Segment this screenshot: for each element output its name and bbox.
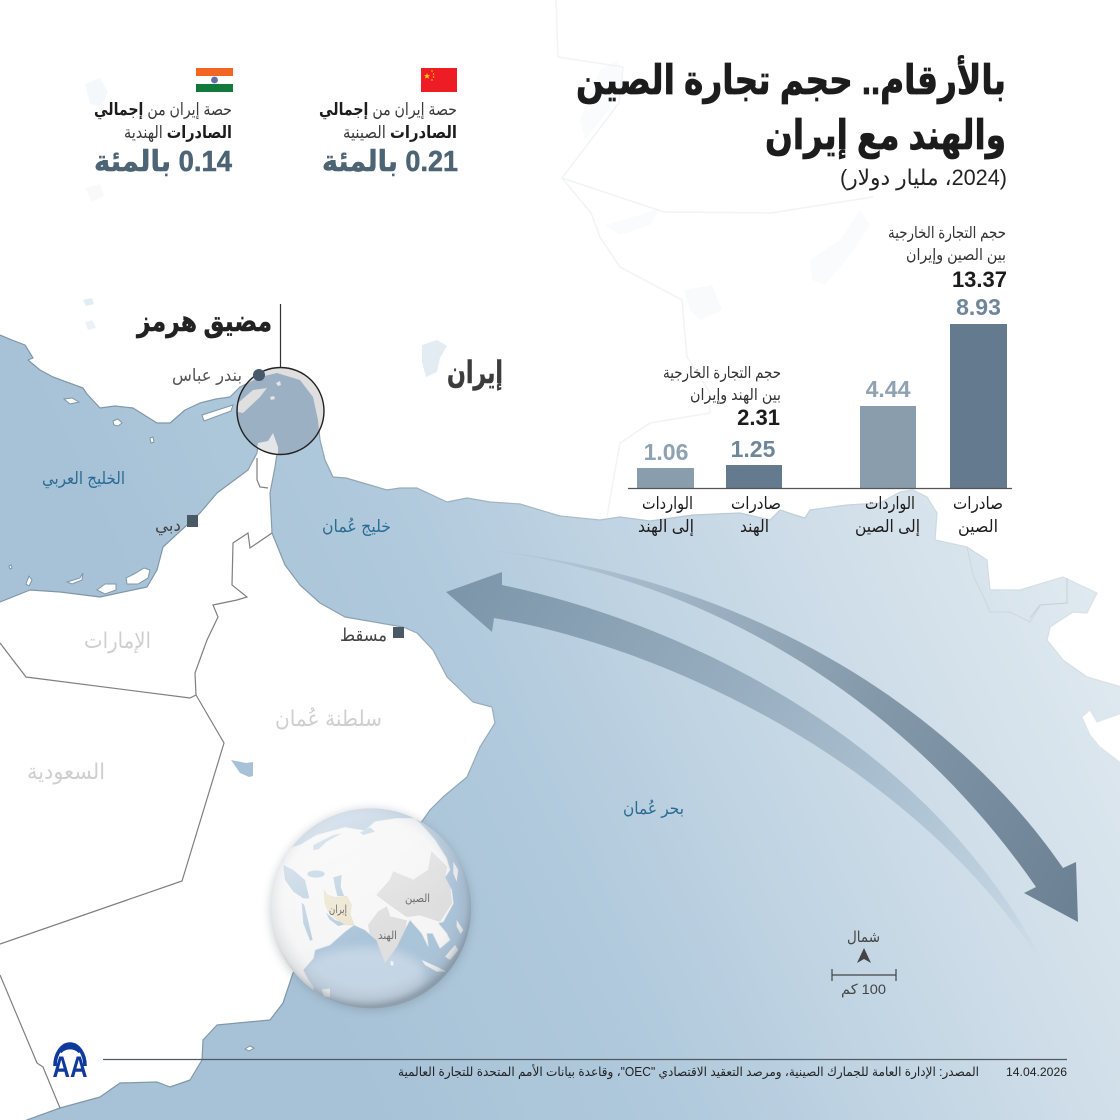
north arrow and scale bar	[832, 929, 896, 998]
source: المصدر: الإدارة العامة للجمارك الصينية، ومرصد التعقيد الاقتصادي "OEC"، وقاعدة بيانات الأمم المتحدة للتجارة العالمية	[398, 1064, 979, 1080]
country labels: السعودية	[27, 759, 105, 784]
bar labels: إلى الهند	[638, 517, 694, 537]
arrow: exports towards China and India	[469, 548, 1078, 922]
bar labels	[638, 494, 1003, 537]
locator globe	[257, 808, 471, 1017]
stat: India share: 0.14 بالمئة	[94, 146, 232, 178]
globe labels: الصين	[405, 893, 430, 905]
country labels: الإمارات	[84, 628, 151, 653]
strait of Hormuz magnifier circle	[236, 366, 325, 456]
bar labels: الواردات	[642, 494, 693, 513]
bar labels: الواردات	[865, 494, 915, 513]
India border	[1030, 578, 1067, 618]
eastern land	[1082, 710, 1120, 766]
India	[368, 907, 407, 963]
stat: India share: الصادرات الهندية	[124, 123, 232, 143]
bar: India exports	[726, 436, 782, 488]
title: بالأرقام.. حجم تجارة الصين	[576, 54, 1006, 105]
AA logo: AA	[52, 1051, 88, 1084]
title	[576, 54, 1006, 160]
faint borders on land	[556, 0, 873, 517]
globe labels: الهند	[378, 930, 397, 942]
continents	[271, 818, 454, 990]
annotation: India-Iran total: 2.31	[737, 405, 780, 430]
city: Dubai: دبي	[155, 516, 181, 536]
city: Dubai	[155, 515, 198, 536]
flag of China	[421, 68, 457, 92]
globe labels	[329, 893, 430, 942]
chart baseline	[628, 488, 1012, 490]
stat: China share: الصادرات الصينية	[343, 123, 457, 142]
leader line for Hormuz	[280, 304, 282, 367]
globe shading	[271, 808, 471, 1008]
sea labels: الخليج العربي	[42, 469, 125, 489]
footer	[103, 1060, 1067, 1080]
bar labels: إلى الصين	[855, 517, 920, 536]
land inside circle	[238, 368, 324, 454]
north arrow and scale bar: شمال	[847, 929, 880, 946]
annotation: India-Iran total	[663, 365, 781, 430]
China	[377, 852, 452, 922]
stat: China share	[319, 68, 458, 178]
sea	[0, 333, 1120, 1120]
annotation: China-Iran total: حجم التجارة الخارجية	[888, 225, 1006, 243]
title: والهند مع إيران	[765, 112, 1006, 160]
flag of India	[196, 68, 233, 92]
bar labels: صادرات	[731, 494, 781, 513]
bar labels: الهند	[740, 517, 769, 537]
stat: China share: حصة إيران من إجمالي	[319, 100, 457, 120]
sea labels: بحر عُمان	[623, 799, 684, 818]
country labels: سلطنة عُمان	[275, 706, 382, 731]
lake in Oman	[231, 760, 253, 777]
annotation: India-Iran total: حجم التجارة الخارجية	[663, 365, 781, 383]
faint lakes on land	[83, 60, 870, 377]
bar: imports to India	[637, 439, 694, 488]
label: strait of Hormuz: مضيق هرمز	[135, 306, 272, 338]
delta creek	[967, 547, 1040, 622]
stat: India share	[94, 68, 233, 178]
bar chart	[628, 294, 1012, 537]
bar: India exports: 1.25	[731, 436, 776, 462]
stat: India share: حصة إيران من إجمالي	[94, 100, 232, 120]
globe highlight	[271, 808, 471, 1008]
stat: China share: 0.21 بالمئة	[322, 146, 458, 178]
sea labels: خليج عُمان	[322, 517, 391, 537]
city: Bandar Abbas: بندر عباس	[172, 366, 242, 385]
AA logo	[52, 1044, 88, 1084]
city: Muscat: مسقط	[340, 625, 387, 645]
bar labels: صادرات	[953, 494, 1003, 513]
inland seas	[283, 827, 375, 941]
annotation: China-Iran total	[888, 225, 1007, 292]
label: Iran: إيران	[447, 355, 503, 391]
Iran	[324, 890, 354, 925]
bar: imports to India: 1.06	[644, 439, 688, 465]
bar labels: الصين	[958, 517, 998, 536]
bar: China exports: 8.93	[956, 294, 1001, 320]
date: 14.04.2026	[1006, 1065, 1067, 1079]
lower ocean highlight	[300, 947, 427, 1007]
islands in the gulf	[9, 398, 254, 1051]
UAE and Oman borders	[0, 458, 272, 1108]
country labels	[27, 628, 382, 784]
bar: China exports	[950, 294, 1007, 488]
north arrow and scale bar: 100 كم	[841, 981, 886, 998]
globe labels: إيران	[329, 904, 347, 916]
Southeast Asia islands	[322, 862, 463, 997]
annotation: China-Iran total: بين الصين وإيران	[906, 247, 1006, 265]
sea labels	[42, 469, 684, 818]
bar: imports to China	[860, 376, 916, 488]
arrow: imports towards the Gulf	[446, 572, 1052, 980]
annotation: India-Iran total: بين الهند وإيران	[690, 387, 781, 405]
annotation: China-Iran total: 13.37	[952, 267, 1007, 292]
subtitle: (2024، مليار دولار)	[840, 165, 1007, 190]
bar: imports to China: 4.44	[866, 376, 911, 402]
